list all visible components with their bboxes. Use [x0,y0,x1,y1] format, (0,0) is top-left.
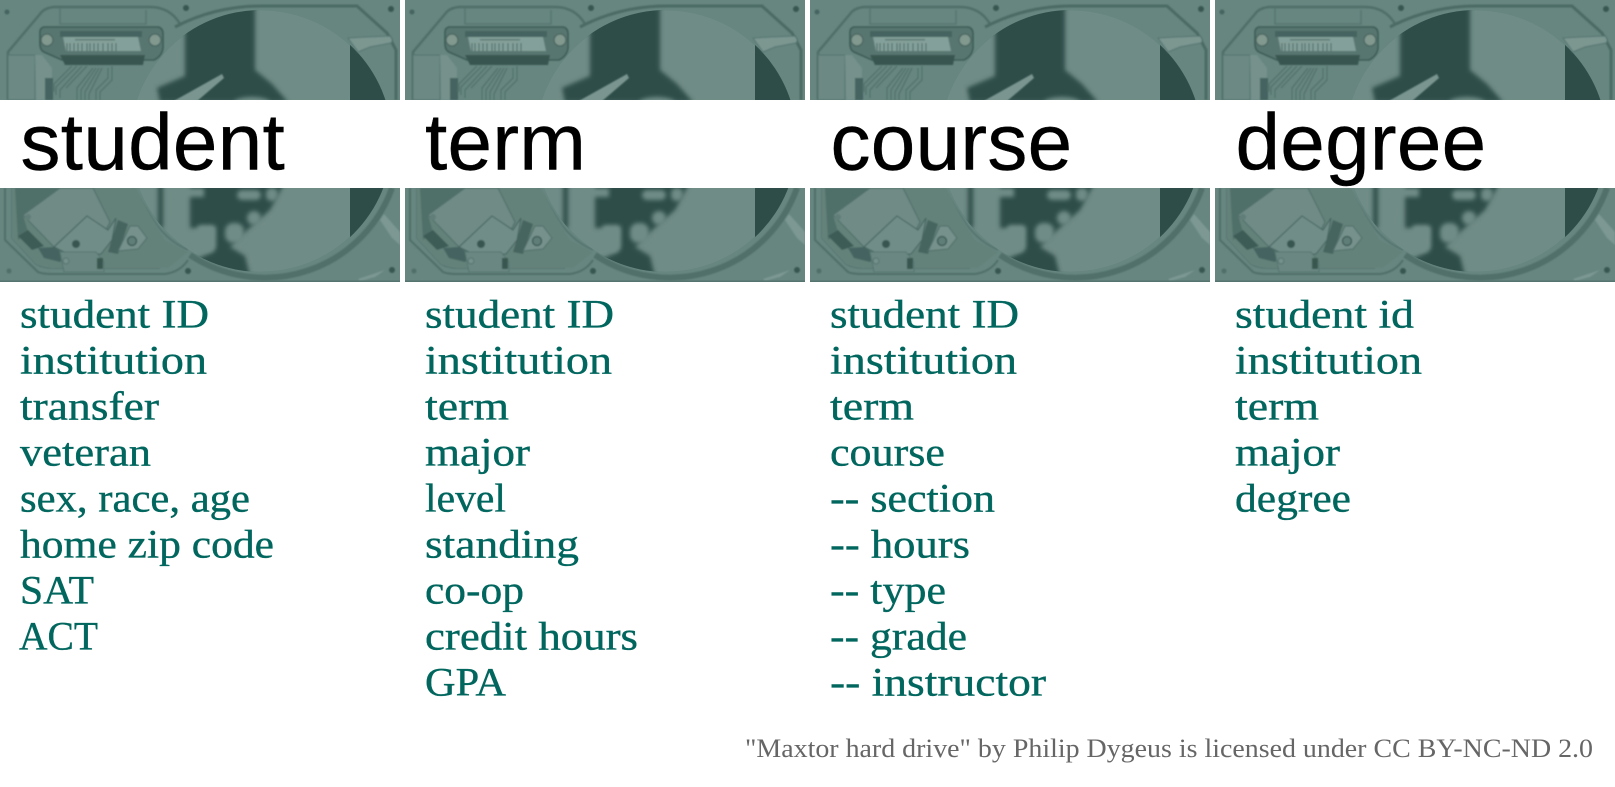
field list: term: standing [425,522,579,566]
field list: course: term [830,384,914,428]
field list: term: student ID [425,292,614,336]
image: hard drive [810,0,1210,282]
field list: degree: major [1235,430,1340,474]
field list: course: -- grade [830,614,967,658]
field list: course [830,292,1046,704]
field list: term: GPA [425,660,506,704]
heading band [405,100,805,188]
field list: term: credit hours [425,614,638,658]
field list: student [19,292,274,658]
field list: course: institution [830,338,1017,382]
field list: term: major [425,430,530,474]
heading band [810,100,1210,188]
panel: term [405,0,805,704]
panel: student [0,0,400,658]
field list: student: ACT [19,614,98,658]
field list: student: transfer [20,384,159,428]
field list: degree: degree [1235,476,1351,520]
field list: student: institution [20,338,207,382]
field list: student: home zip code [20,522,274,566]
heading: student: student [20,98,285,186]
field list: term: term [425,384,509,428]
field list: course: course [830,430,945,474]
field list: term: co-op [425,568,524,612]
heading band [1215,100,1615,188]
image: hard drive [405,0,805,282]
field list: course: -- hours [830,522,970,566]
image: hard drive [1215,0,1615,282]
image: hard drive [0,0,400,282]
field list: course: -- type [830,568,946,612]
field list: degree: institution [1235,338,1422,382]
field list: course: -- section [830,476,995,520]
field list: degree: student id [1235,292,1414,336]
field list: student: SAT [20,568,94,612]
heading: course: course [830,98,1072,186]
field list: term: institution [425,338,612,382]
field list: term [425,292,638,704]
field list: student: veteran [20,430,151,474]
heading: term: term [425,98,586,186]
field list: student: sex, race, age [20,476,250,520]
field list: student: student ID [20,292,209,336]
heading band [0,100,400,188]
field list: degree: term [1235,384,1319,428]
panel: course [810,0,1210,704]
panel: degree [1215,0,1615,520]
field list: term: level [425,476,506,520]
field list: course: student ID [830,292,1019,336]
field list: degree [1235,292,1422,520]
image credit: "Maxtor hard drive" by Philip Dygeus is licensed under CC BY-NC-ND 2.0 [745,734,1593,763]
heading: degree: degree [1236,98,1486,186]
field list: course: -- instructor [830,660,1046,704]
